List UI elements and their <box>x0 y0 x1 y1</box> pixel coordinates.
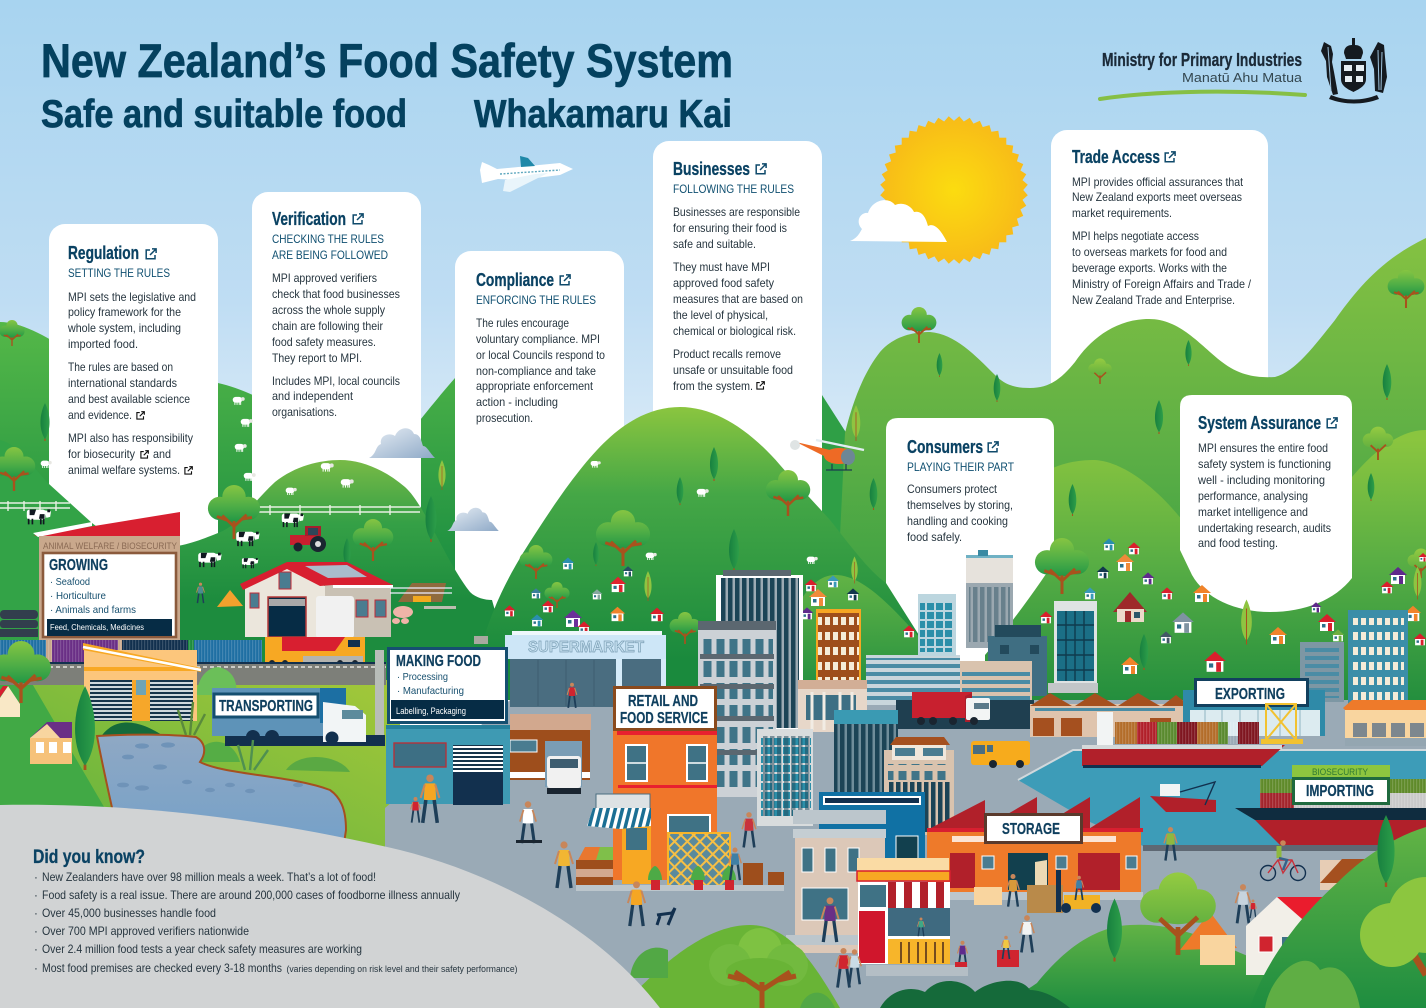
shrub by the grey panel <box>630 948 668 978</box>
fences <box>0 501 420 515</box>
panel text: System Assurance <box>1197 413 1337 550</box>
woman with shopping bags <box>821 897 839 942</box>
panel text: Compliance: voluntary compliance. MPI <box>476 333 600 346</box>
panel text: Verification: They report to MPI. <box>272 352 362 365</box>
panel text: System Assurance: performance, analysing <box>1198 490 1308 503</box>
icon: external link <box>988 442 998 452</box>
sign: importing: IMPORTING <box>1306 783 1374 800</box>
panel text: Compliance: The rules encourage <box>476 317 569 330</box>
marae <box>1113 592 1147 622</box>
river with fish <box>97 735 346 870</box>
panel text: Compliance: Compliance <box>476 270 554 290</box>
rolling back hills right <box>835 238 1426 660</box>
panel background: Businesses <box>653 141 822 541</box>
panel text: Verification: food safety measures. <box>272 336 376 349</box>
people on right streets <box>1164 827 1257 923</box>
panel text: Verification: and independent <box>272 390 354 403</box>
Did you know text: Food safety is a real issue. There are around 200,000 cases of foodborne illness annually <box>42 889 460 902</box>
panel text: Regulation: and evidence. <box>68 409 132 422</box>
panel text: Businesses: the level of physical, <box>673 309 768 322</box>
panel text: Consumers: themselves by storing, <box>907 499 1013 512</box>
panel text: Compliance: appropriate enforcement <box>476 380 594 393</box>
container ship exporting <box>1082 712 1285 768</box>
Did you know text: · <box>34 962 38 975</box>
freight train <box>0 637 365 666</box>
right cypress <box>1377 815 1395 887</box>
panel text: Businesses: Product recalls remove <box>673 348 781 361</box>
panel text: System Assurance: undertaking research, audits <box>1198 522 1331 535</box>
panel text: Verification <box>272 209 400 419</box>
helicopter <box>790 440 864 470</box>
panel background: Trade Access <box>1051 130 1268 410</box>
supermarket <box>474 631 666 707</box>
sheep <box>41 397 818 564</box>
people around cafe <box>836 915 1034 988</box>
sign: retail and food service: FOOD SERVICE <box>620 710 708 727</box>
bottom centre hill <box>620 925 840 1008</box>
farm shed and pigs <box>390 583 456 624</box>
white house with red roof <box>1246 859 1375 975</box>
people walking near making food <box>411 774 439 823</box>
subtitle: Safe and suitable food: Safe and suitable food <box>41 93 407 136</box>
orange tower <box>816 609 861 685</box>
sign: making food: Labelling, Packaging <box>396 705 466 716</box>
farmhouse <box>240 562 393 638</box>
shrub under tree <box>800 993 835 1008</box>
panel text: Businesses: chemical or biological risk. <box>673 325 796 338</box>
panel text: Compliance: or local Councils respond to <box>476 349 605 362</box>
icon: external link <box>560 275 570 285</box>
cows <box>27 509 304 568</box>
outdoor table <box>743 863 784 885</box>
panel text: Compliance <box>476 270 605 425</box>
panel background: Consumers <box>886 418 1054 680</box>
panel text: Verification: MPI approved verifiers <box>272 272 377 285</box>
panel text: Trade Access <box>1072 147 1252 307</box>
panel text: System Assurance: well - including monitoring <box>1197 474 1325 487</box>
panel text: Verification: CHECKING THE RULES <box>272 233 384 246</box>
Did you know text: Over 2.4 million food tests a year check safety measures are working <box>42 943 362 956</box>
panel text: Verification: Verification <box>272 209 346 229</box>
panel text: Businesses: approved food safety <box>673 277 774 290</box>
panel text: Trade Access: Trade Access <box>1072 147 1160 167</box>
ground: left field <box>0 680 210 810</box>
Did you know text: Most food premises are checked every 3-18 months <box>42 962 282 975</box>
glass office and teal tower <box>866 594 960 705</box>
exporting building and sign <box>1183 680 1325 736</box>
back hill right of Businesses <box>780 360 880 640</box>
sign: making food: · Manufacturing <box>397 685 464 697</box>
slate block <box>988 625 1047 696</box>
panel text: Regulation: SETTING THE RULES <box>68 267 170 280</box>
icon: external link <box>137 412 144 419</box>
Did you know text: Did you know? <box>33 847 145 868</box>
awning and fruit stand <box>576 794 784 891</box>
Did you know text: · <box>34 871 38 884</box>
did you know grey panel <box>0 805 660 1008</box>
panel text: Trade Access: New Zealand exports meet overseas <box>1072 191 1242 204</box>
hill centre peak <box>480 407 960 700</box>
plane <box>480 156 573 192</box>
panel text: Trade Access: market requirements. <box>1072 207 1172 220</box>
sign: Growing: · Animals and farms <box>50 604 136 616</box>
shrub foreground right <box>1265 961 1360 1008</box>
panel text: Trade Access: to overseas markets for food and <box>1072 246 1227 259</box>
logo: Ministry for Primary Industries: Manatū Ahu Matua <box>1182 70 1303 85</box>
hillside houses <box>504 538 1426 674</box>
panel text: Trade Access: MPI provides official assurances that <box>1072 176 1244 189</box>
panel text: Regulation: imported food. <box>68 338 138 351</box>
panel background: System Assurance <box>1180 395 1352 612</box>
panel text: Regulation: policy framework for the <box>68 306 181 319</box>
orange roofed wharf shed <box>1343 700 1426 746</box>
panel text: Consumers: Consumers <box>907 437 983 457</box>
white cloud over sun <box>850 200 947 242</box>
sign: Growing: GROWING <box>49 557 108 574</box>
panel text: Verification: ARE BEING FOLLOWED <box>272 249 388 262</box>
hill with fence and sheep <box>140 460 520 700</box>
panel text: Compliance: non-compliance and take <box>476 365 596 378</box>
panel text: Compliance: action - including <box>476 396 558 409</box>
blue building <box>819 792 925 864</box>
hillside trees <box>0 270 1426 644</box>
tractor <box>290 526 326 552</box>
sign: storage: STORAGE <box>1002 821 1060 838</box>
panel text: Consumers <box>907 437 1014 544</box>
sign: making food: · Processing <box>397 671 448 683</box>
harbour water <box>1018 750 1426 851</box>
delivery depot <box>510 714 591 794</box>
hill behind Consumers <box>1040 460 1190 620</box>
sign: Growing: Feed, Chemicals, Medicines <box>50 622 144 632</box>
panel text: System Assurance: System Assurance <box>1198 413 1321 433</box>
growing barn and sign <box>33 512 180 666</box>
sign: making food: MAKING FOOD <box>396 653 481 670</box>
biosecurity tag <box>1292 765 1390 779</box>
panel text: Compliance: prosecution. <box>476 412 533 425</box>
panel text: Regulation: international standards <box>68 377 177 390</box>
panel text: Regulation: Regulation <box>68 243 139 263</box>
icon: external link <box>353 214 363 224</box>
panel text: Verification: organisations. <box>272 406 337 419</box>
growing barn and sign: ANIMAL WELFARE / BIOSECURITY <box>43 541 177 551</box>
panel text: Regulation: whole system, including <box>67 322 181 335</box>
panel text: Businesses: FOLLOWING THE RULES <box>673 183 794 196</box>
panel text: Regulation: MPI also has responsibility <box>68 432 193 445</box>
panel text: System Assurance: market intelligence and <box>1198 506 1308 519</box>
ground: street <box>385 700 1426 1008</box>
pallets and forklift <box>974 860 1101 913</box>
supermarket: SUPERMARKET <box>528 639 644 656</box>
panel text: Businesses: Businesses are responsible <box>673 206 800 219</box>
icon: external link <box>1327 418 1337 428</box>
back city: dark tower <box>716 570 803 730</box>
back hill centre <box>400 346 620 640</box>
subtitle: Whakamaru Kai: Whakamaru Kai <box>474 93 732 136</box>
panel text: Businesses <box>673 159 803 393</box>
icon: New Zealand coat of arms <box>1321 38 1387 104</box>
panel text: Compliance: ENFORCING THE RULES <box>476 294 596 307</box>
importing ship and sign <box>1235 765 1426 845</box>
shrubs near river <box>100 667 350 772</box>
warehouses along wharf <box>1030 693 1190 737</box>
bottom right large hill <box>1250 827 1426 1008</box>
classical building <box>798 680 867 732</box>
panel text: Businesses: from the system. <box>673 380 753 393</box>
panel text: Trade Access: beverage exports. Works with the <box>1072 262 1227 275</box>
panel text: Consumers: food safely. <box>907 531 962 544</box>
shopper <box>567 683 577 708</box>
sign: retail and food service: RETAIL AND <box>628 693 698 710</box>
Did you know text: · <box>34 943 38 956</box>
potted plants <box>648 866 736 890</box>
tan building <box>884 737 954 835</box>
sign: making food <box>388 648 506 722</box>
silos <box>0 610 38 637</box>
sign: Growing: · Horticulture <box>50 590 106 602</box>
bottom right low hill <box>880 925 1426 1008</box>
panel text: Businesses: measures that are based on <box>673 293 803 306</box>
sign: exporting <box>1196 680 1308 706</box>
sign: Growing: · Seafood <box>50 576 90 588</box>
Did you know text: Over 700 MPI approved verifiers nationwide <box>42 925 249 938</box>
railway and road <box>0 662 386 685</box>
panel text: Consumers: PLAYING THEIR PART <box>907 461 1014 474</box>
glass tower with frame <box>1048 601 1098 693</box>
Did you know text <box>33 847 518 975</box>
far left hill <box>0 440 180 700</box>
right office blocks <box>1300 610 1408 710</box>
logo: Ministry for Primary Industries: Ministry for Primary Industries <box>1102 50 1302 70</box>
Did you know text: · <box>34 925 38 938</box>
icon: external link <box>756 164 766 174</box>
panel text: Regulation: and <box>153 448 171 461</box>
harakeke and shrubs <box>178 702 268 770</box>
beige block <box>960 661 1032 711</box>
icon: external link <box>185 467 192 474</box>
cypress in foreground <box>1107 898 1122 962</box>
panel text: Regulation: The rules are based on <box>68 361 173 374</box>
grey glass block <box>757 729 813 826</box>
storage warehouse and sign <box>927 797 1143 900</box>
panel text: System Assurance: MPI ensures the entire food <box>1198 442 1328 455</box>
sign: exporting: EXPORTING <box>1215 686 1285 703</box>
cyclist <box>1260 840 1306 880</box>
sign: importing <box>1294 778 1388 804</box>
dark shrub line <box>880 981 1070 1008</box>
cream heritage building <box>786 810 886 953</box>
panel text: Verification: Includes MPI, local councils <box>272 375 400 388</box>
sign: transporting: TRANSPORTING <box>219 698 313 715</box>
city backing hills right <box>985 430 1426 730</box>
small hill behind towers <box>770 575 935 700</box>
foreground tree <box>1140 872 1216 955</box>
logo: Ministry for Primary Industries <box>1100 50 1305 99</box>
panel text: Businesses: safe and suitable. <box>673 238 756 251</box>
Did you know text: New Zealanders have over 98 million meals a week. That’s a lot of food! <box>42 871 376 884</box>
tall grey tower <box>966 550 1013 648</box>
large foreground tree <box>709 928 808 1008</box>
panel text: Consumers: Consumers protect <box>907 483 998 496</box>
icon: external link <box>141 451 148 458</box>
panel text: System Assurance: safety system is functioning <box>1198 458 1331 471</box>
ground: yellow green field <box>30 680 400 860</box>
main title: New Zealand’s Food Safety System <box>41 34 733 87</box>
panel text: Businesses: They must have MPI <box>673 261 770 274</box>
yellow gantry crane <box>1262 704 1302 743</box>
making food building <box>375 648 510 805</box>
panel background: Compliance <box>455 251 624 621</box>
farm person and tent <box>197 583 243 607</box>
panel text: Verification: chain are following their <box>272 320 383 333</box>
icon: external link <box>1165 152 1175 162</box>
sun <box>880 116 1028 264</box>
hillside cypress trees <box>40 340 1421 670</box>
people on the street <box>516 801 756 926</box>
panel text: Businesses: Businesses <box>673 159 750 179</box>
Did you know text: Over 45,000 businesses handle food <box>42 907 216 920</box>
back hills left <box>0 322 300 560</box>
panel text: Trade Access: Ministry of Foreign Affairs and Trade / <box>1072 278 1252 291</box>
panel text: Regulation: for biosecurity <box>68 448 135 461</box>
orange roofed cottage <box>1180 912 1237 965</box>
panel text: System Assurance: and food testing. <box>1198 537 1278 550</box>
sign: storage <box>986 814 1082 842</box>
Did you know text: · <box>34 907 38 920</box>
panel text: Verification: check that food businesses <box>272 288 400 301</box>
dark striped tower <box>834 710 898 808</box>
cafe <box>857 858 968 976</box>
retail and food service building <box>613 688 730 887</box>
icon: external link <box>146 249 156 259</box>
truck: transporting <box>212 688 385 746</box>
sign: retail and food service <box>614 688 716 730</box>
Did you know text: · <box>34 889 38 902</box>
fishing boat <box>1150 782 1216 812</box>
Did you know text: (varies depending on risk level and their safety performance) <box>286 964 518 974</box>
sign: transporting <box>214 694 318 717</box>
yellow van <box>971 741 1030 768</box>
panel text: Regulation: and best available science <box>68 393 190 406</box>
corner tree <box>1360 877 1426 975</box>
panel background: Regulation <box>49 224 218 554</box>
grey office block <box>698 621 776 797</box>
sign: Growing <box>43 553 176 637</box>
panel background: Verification <box>252 192 421 522</box>
panel text: Regulation <box>67 243 196 477</box>
road with red truck <box>896 692 1034 729</box>
left tree and small houses <box>0 641 95 770</box>
locomotive <box>265 637 365 666</box>
icon: external link <box>757 382 764 389</box>
panel text: Verification: across the whole supply <box>272 304 385 317</box>
panel text: Regulation: MPI sets the legislative and <box>68 291 196 304</box>
yellow shed <box>83 643 201 721</box>
biosecurity tag: BIOSECURITY <box>1312 767 1369 778</box>
panel text: Trade Access: MPI helps negotiate access <box>1072 230 1199 243</box>
panel text: Businesses: unsafe or unsuitable food <box>673 364 793 377</box>
panel text: Trade Access: New Zealand Trade and Enterprise. <box>1072 294 1235 307</box>
panel text: Consumers: handling and cooking <box>907 515 1008 528</box>
panel text: Businesses: for ensuring their food is <box>673 222 787 235</box>
panel text: Regulation: animal welfare systems. <box>68 464 180 477</box>
grey clouds <box>369 428 499 531</box>
